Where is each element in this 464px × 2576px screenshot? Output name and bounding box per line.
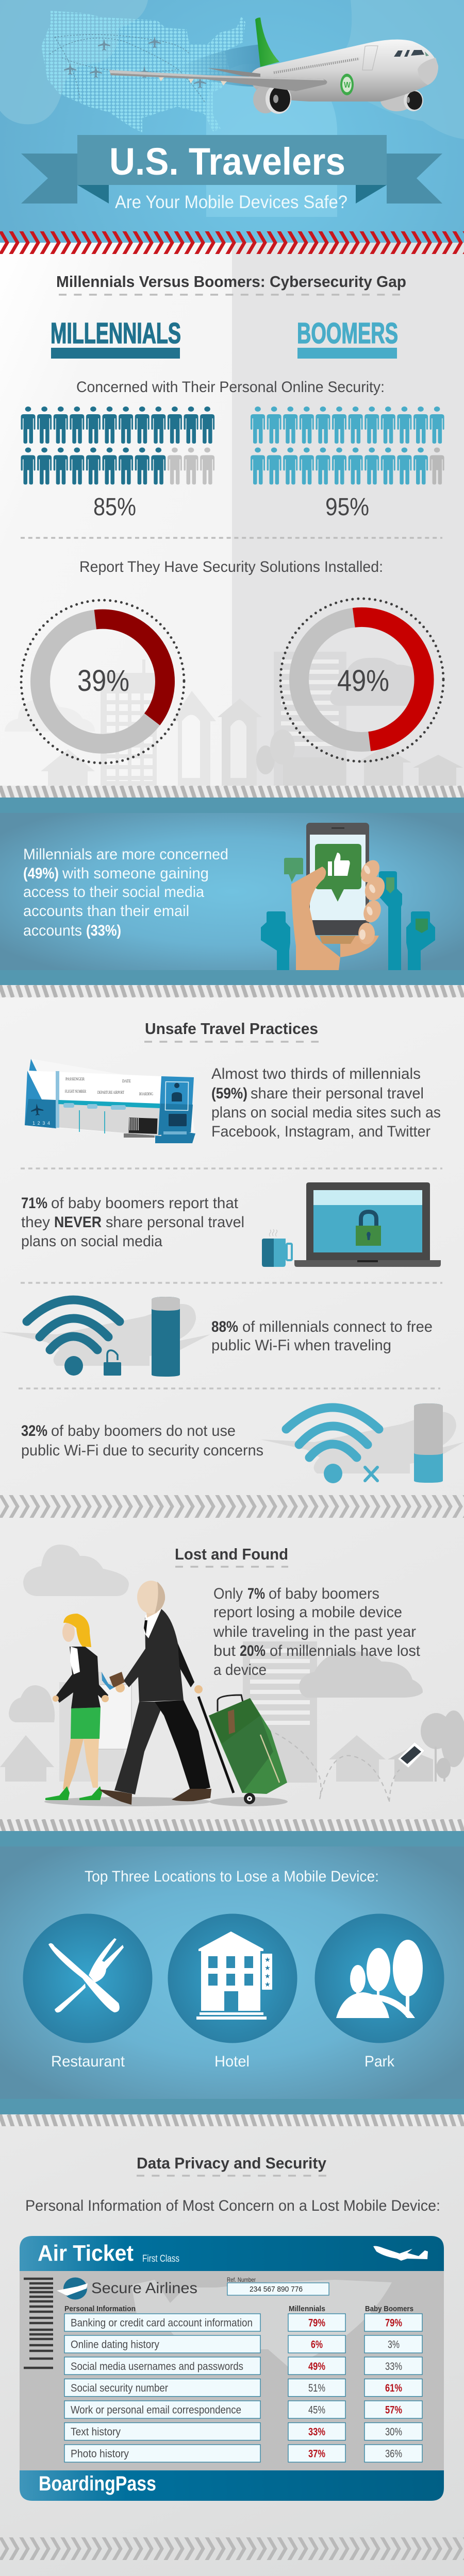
text: two thirds of millennials share plans: plans on social media sites such as — [211, 1104, 441, 1121]
diagonal stripe divider — [0, 1819, 464, 1831]
text: lost device stats: 20% — [240, 1642, 266, 1659]
chart: donut millennials 39 percent — [21, 600, 184, 763]
ticket header text: First Class — [142, 2253, 179, 2264]
table column heads: Millennials — [289, 2304, 325, 2313]
icon: airline tickets — [25, 1059, 195, 1143]
table row: social media: Social media usernames and passwords — [71, 2361, 243, 2372]
chevron divider red — [0, 231, 464, 254]
chevron divider gray — [0, 2537, 464, 2560]
text: two thirds of millennials share plans: (59%) — [211, 1085, 247, 1102]
icon: hotel: ★ — [264, 1980, 271, 1988]
panel: boarding pass table — [20, 2236, 444, 2501]
text: two thirds of millennials share plans: share their personal travel — [251, 1085, 424, 1102]
icon: wifi with x mark — [260, 1403, 464, 1483]
text: lost device stats: while traveling in the past year — [213, 1623, 416, 1640]
text: boomers never share: 71% — [21, 1195, 47, 1212]
chart: boomers pictogram 95 percent — [251, 406, 444, 484]
icon: dotted US map with flight routes — [41, 7, 260, 132]
callout text: (33%) — [86, 922, 121, 939]
table row: email: 45% — [308, 2404, 325, 2416]
header sky background — [0, 0, 464, 243]
table column heads: Baby Boomers — [365, 2304, 413, 2313]
text: boomers never share — [21, 1195, 244, 1250]
table row: email: 57% — [385, 2404, 402, 2416]
text: millennials connect to free wifi: 88% — [211, 1318, 238, 1335]
text: boomers never share: plans on social media — [21, 1233, 162, 1250]
icon: airline tickets: BOARDING — [139, 1092, 153, 1096]
table row: photo history: Photo history — [71, 2448, 129, 2460]
text: boomers never share: NEVER — [54, 1214, 102, 1231]
text: two thirds of millennials share plans: Almost two thirds of millennials — [211, 1065, 421, 1082]
table row: email — [64, 2401, 422, 2418]
text: boomers never share: share personal travel — [106, 1214, 244, 1231]
table row: online dating: 6% — [311, 2339, 323, 2350]
diagonal stripe divider — [0, 786, 464, 798]
text: millennials connect to free wifi: public Wi-Fi when traveling — [211, 1337, 391, 1354]
heading: lost and found: Lost and Found — [175, 1545, 288, 1563]
title ribbon — [21, 135, 442, 204]
title: U.S. Travelers — [109, 140, 345, 183]
callout text: accounts than their email — [23, 903, 189, 920]
panel: top three locations — [0, 1831, 464, 2114]
background city silhouette — [5, 652, 463, 786]
woman traveler — [45, 1614, 131, 1800]
heading: unsafe travel practices: Unsafe Travel Practices — [145, 1020, 318, 1038]
icon: airline tickets: FLIGHT NUMBER — [65, 1089, 86, 1094]
icon: hotel — [168, 1913, 297, 2043]
table row: social media: 49% — [308, 2361, 325, 2372]
text: lost device stats: report losing a mobile device — [213, 1604, 402, 1621]
text: report security solutions: Report They Have Security Solutions Installed: — [79, 558, 383, 575]
table row: text history — [64, 2422, 422, 2440]
callout text: (49%) — [23, 865, 59, 882]
text: boomers avoid public wifi — [21, 1422, 263, 1459]
scene background: clouds and buildings — [0, 1545, 464, 1783]
callout text: accounts — [23, 922, 82, 939]
icon: hand holding phone with thumbs up — [261, 823, 435, 970]
callout text: access to their social media — [23, 884, 204, 901]
text: boomers avoid public wifi: 32% — [21, 1422, 47, 1439]
barcode — [24, 2279, 53, 2368]
table row: photo history: 37% — [308, 2448, 325, 2460]
chart: millennials pictogram 85 percent — [21, 406, 214, 484]
icon: airline tickets: PASSENGER — [65, 1077, 85, 1081]
man traveler — [99, 1581, 211, 1805]
table row: photo history: 36% — [385, 2448, 402, 2460]
text: lost device stats — [213, 1585, 421, 1679]
label: park: Park — [364, 2053, 395, 2070]
chart: donut boomers 49 percent: 49% — [337, 664, 389, 698]
chart: donut boomers 49 percent — [280, 599, 443, 761]
table row: social media: 33% — [385, 2361, 402, 2372]
reference number: 234 567 890 776 — [250, 2285, 303, 2294]
label: millennials: MILLENNIALS — [51, 317, 181, 350]
text: two thirds of millennials share plans: Facebook, Instagram, and Twitter — [211, 1123, 430, 1140]
text: personal information subheading: Personal Information of Most Concern on a Lost Mobile Device: — [25, 2197, 440, 2214]
text: concerned with security: Concerned with Their Personal Online Security: — [76, 379, 385, 396]
text: boomers avoid public wifi: public Wi-Fi due to security concerns — [21, 1442, 263, 1459]
panel: cybersecurity gap background — [0, 243, 464, 786]
callout text: with someone gaining — [62, 865, 209, 882]
icon: plane silhouette — [373, 2246, 428, 2261]
icon: airline tickets: DEPARTURE AIRPORT — [97, 1090, 124, 1095]
callout text — [23, 846, 228, 939]
icon: laptop with padlock and mug — [262, 1182, 441, 1267]
table row: online dating: 3% — [388, 2339, 400, 2350]
icon: airline tickets: DATE — [122, 1079, 131, 1083]
chevron divider gray — [0, 1495, 464, 1518]
label: boomers: BOOMERS — [297, 317, 398, 350]
table row: online dating — [64, 2335, 422, 2353]
table row: banking — [64, 2314, 422, 2331]
table row: text history: Text history — [71, 2426, 121, 2438]
table row: banking: Banking or credit card account information — [71, 2317, 253, 2329]
reference number: Ref. Number — [227, 2276, 256, 2283]
text: lost device stats: of baby boomers — [269, 1585, 379, 1602]
label: boomers — [297, 317, 398, 359]
label: restaurant: Restaurant — [51, 2053, 125, 2070]
icon: airline tickets: 1 2 3 4 — [32, 1121, 50, 1126]
icon: park — [314, 1913, 444, 2043]
icon: hotel: ★ — [264, 1972, 271, 1980]
table row: text history: 33% — [308, 2426, 325, 2438]
text: lost device stats: of millennials have lost — [270, 1642, 421, 1659]
table row: social security: 61% — [385, 2382, 402, 2394]
table column heads — [64, 2304, 413, 2313]
illustration: travelers and suitcase — [44, 1581, 288, 1806]
airline logo — [57, 2277, 197, 2300]
table row: banking: 79% — [385, 2317, 402, 2329]
subheading: Top Three Locations to Lose a Mobile Device: — [85, 1868, 379, 1885]
heading: Millennials versus boomers: Millennials Versus Boomers: Cybersecurity Gap — [56, 273, 406, 291]
label: millennials — [51, 317, 181, 359]
text: two thirds of millennials share plans — [211, 1065, 441, 1140]
ticket footer text: BoardingPass — [39, 2472, 156, 2495]
table row: social security: Social security number — [71, 2382, 168, 2394]
table row: social security: 51% — [308, 2382, 325, 2394]
table row: online dating: Online dating history — [71, 2339, 159, 2350]
text: boomers never share: of baby boomers report that — [51, 1195, 239, 1212]
diagonal stripe divider — [0, 2114, 464, 2126]
ticket header text: Air Ticket — [38, 2241, 134, 2266]
icon: hotel: ★ — [264, 1964, 271, 1972]
text: lost device stats: Only — [213, 1585, 243, 1602]
table row: photo history — [64, 2445, 422, 2462]
icon: airplane — [109, 18, 438, 114]
text: millennials connect to free wifi — [211, 1318, 433, 1354]
text: lost device stats: 7% — [247, 1585, 265, 1602]
subtitle: Are Your Mobile Devices Safe? — [115, 192, 347, 212]
panel: lower gray background A — [0, 997, 464, 1819]
table row: text history: 30% — [385, 2426, 402, 2438]
reference number — [227, 2276, 329, 2295]
airline logo: Secure Airlines — [91, 2280, 197, 2297]
callout text: Millennials are more concerned — [23, 846, 228, 863]
stat: 85 percent: 85% — [93, 494, 136, 521]
heading: data privacy and security: Data Privacy and Security — [137, 2154, 327, 2172]
label: hotel: Hotel — [214, 2053, 250, 2070]
text: millennials connect to free wifi: of millennials connect to free — [242, 1318, 433, 1335]
stat: 95 percent: 95% — [325, 494, 369, 521]
table column heads: Personal Information — [64, 2304, 136, 2313]
table row: social media — [64, 2357, 422, 2375]
icon: restaurant — [23, 1913, 153, 2043]
text: boomers avoid public wifi: of baby boomers do not use — [51, 1422, 236, 1439]
icon: hotel: ★ — [264, 1956, 271, 1963]
text: lost device stats: a device — [213, 1662, 267, 1679]
icon: wifi with open padlock — [0, 1297, 210, 1377]
text: lost device stats: but — [213, 1642, 236, 1659]
diagonal stripe divider — [0, 985, 464, 997]
panel: lower gray background B with watermark planes — [0, 2126, 464, 2576]
table row: social security — [64, 2379, 422, 2397]
chart: donut millennials 39 percent: 39% — [77, 664, 129, 698]
suitcase — [198, 1695, 287, 1804]
table row: banking: 79% — [308, 2317, 325, 2329]
table row: email: Work or personal email correspondence — [71, 2404, 241, 2416]
icon: airplane: W — [344, 81, 351, 90]
text: boomers never share: they — [21, 1214, 50, 1231]
panel: social media concern — [0, 798, 464, 985]
icon: bouncing smartphone — [275, 1733, 425, 1802]
